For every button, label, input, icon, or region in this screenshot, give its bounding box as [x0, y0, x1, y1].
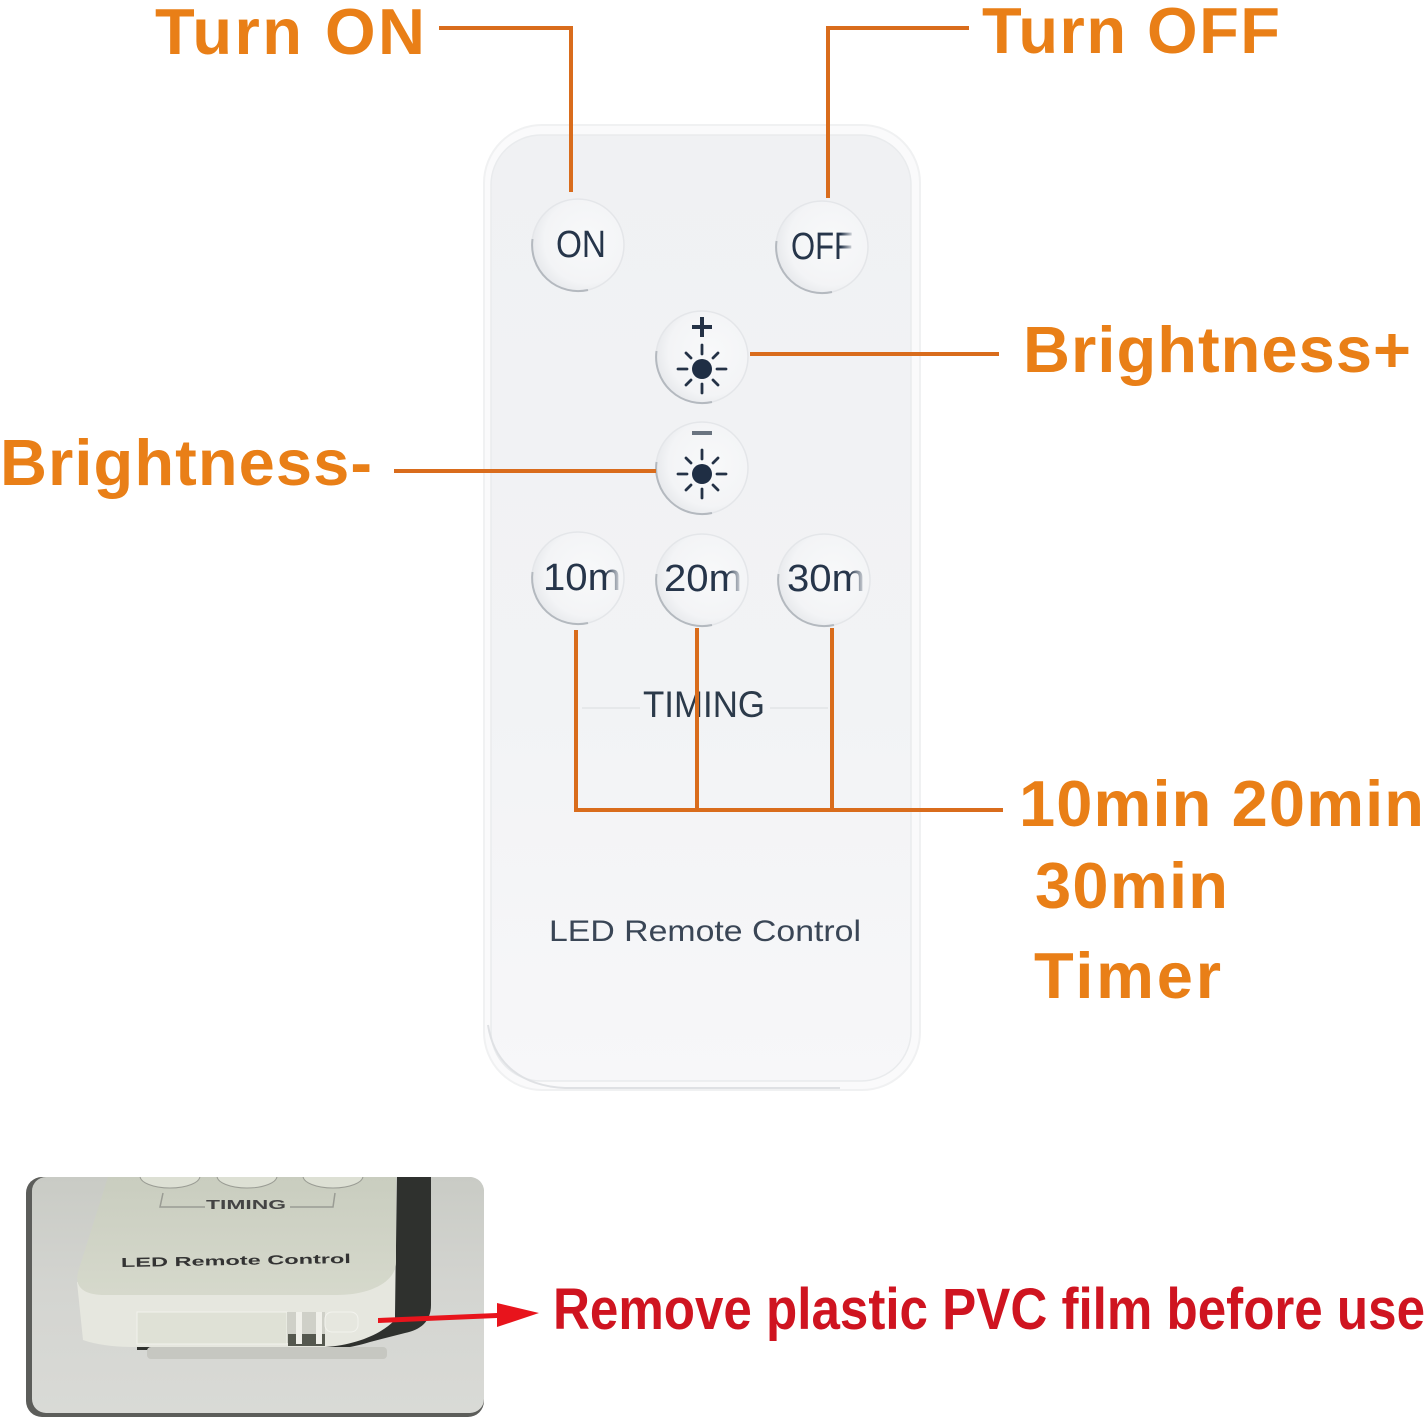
callout: Turn OFF	[828, 0, 1280, 198]
timing group label: TIMING	[643, 684, 765, 725]
button: ON	[532, 199, 624, 291]
photo: remote battery film: TIMING	[206, 1197, 286, 1212]
button: 30m	[778, 534, 870, 626]
callout: Brightness+: Brightness+	[1023, 313, 1411, 386]
button: ON: ON	[556, 224, 606, 266]
black band behind remote	[137, 1177, 431, 1350]
callout: timer: 10min 20min	[1019, 767, 1424, 840]
remote brand text: LED Remote Control	[549, 915, 861, 948]
button: brightness minus	[656, 422, 748, 514]
top face	[78, 1247, 396, 1295]
arrow: red pointer to film	[378, 1303, 539, 1327]
button: 10m: 10m	[543, 557, 621, 599]
tray strip	[147, 1347, 387, 1359]
callout: timer	[576, 628, 1424, 1012]
upper buttons and timing	[160, 1193, 335, 1207]
button: OFF: OFF	[791, 226, 853, 268]
callout: Brightness-: Brightness-	[0, 426, 372, 499]
photo: remote battery film: LED Remote Control	[121, 1251, 351, 1270]
button: 10m	[532, 532, 624, 624]
callout: Turn ON	[155, 0, 571, 192]
photo: remote battery film	[26, 1164, 484, 1417]
side face	[77, 1270, 395, 1347]
battery tab	[137, 1312, 287, 1344]
callout: timer: Timer	[1034, 939, 1221, 1012]
button: 30m: 30m	[787, 558, 865, 600]
button: 20m: 20m	[664, 558, 742, 600]
button: brightness plus	[656, 311, 748, 403]
remote control body	[484, 125, 920, 1090]
button: 20m	[656, 534, 748, 626]
callout: timer: 30min	[1035, 849, 1228, 922]
button: OFF	[776, 201, 868, 293]
